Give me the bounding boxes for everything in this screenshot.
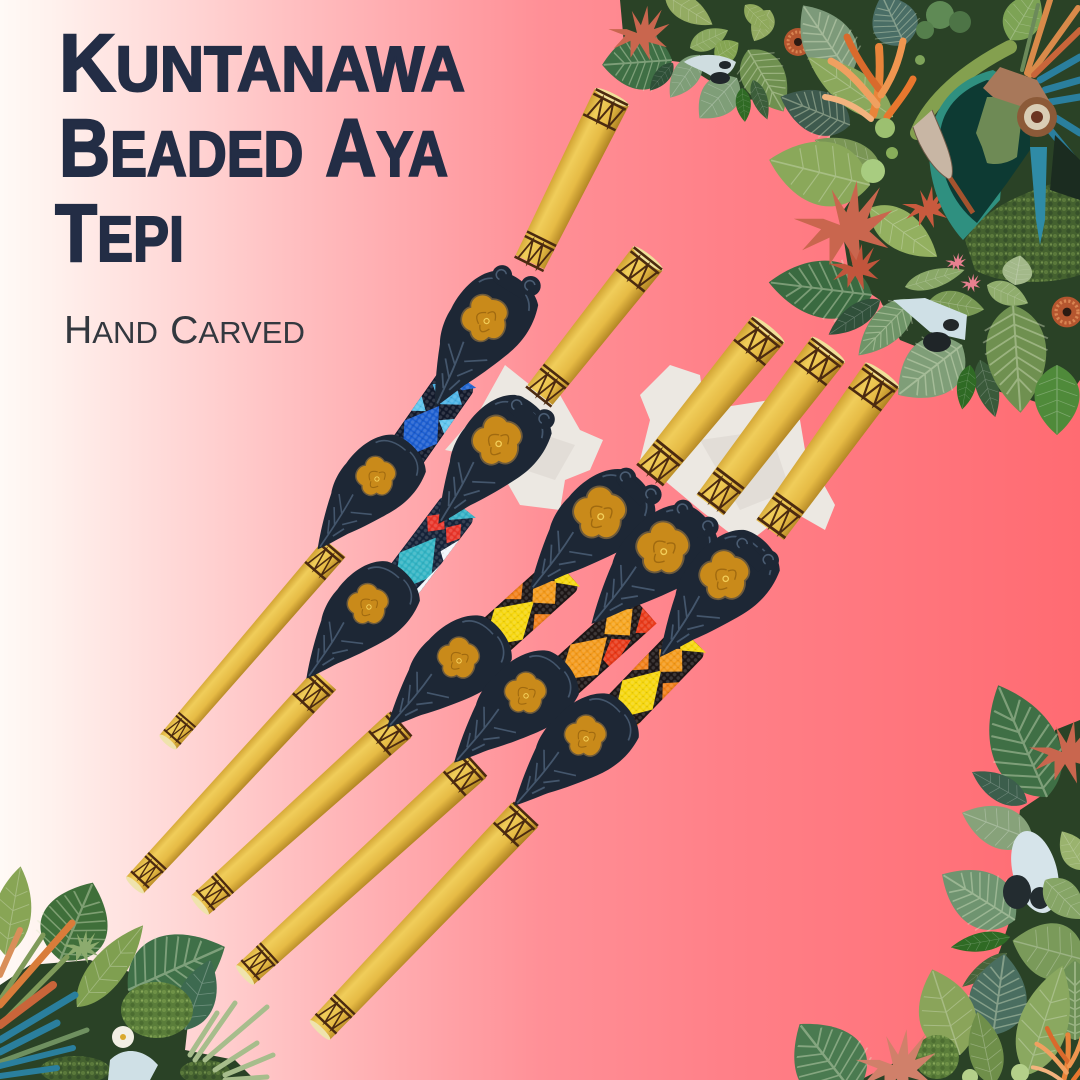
tropical flowers <box>794 37 1080 327</box>
mossy ground <box>965 175 1080 282</box>
tepi 5: yellow and orange beads <box>305 360 901 1045</box>
foliage: bottom right jungle cluster <box>769 671 1080 1080</box>
subtitle: Hand Carved <box>64 305 305 353</box>
leaves <box>600 0 1080 435</box>
quartz crystals behind tepis <box>445 365 835 545</box>
title: Beaded Aya <box>59 95 448 196</box>
leaves and feathers <box>0 863 273 1080</box>
title: Kuntanawa <box>59 10 465 111</box>
foliage: bottom left jungle cluster <box>0 863 273 1080</box>
tepi 1: blue beads <box>155 85 631 753</box>
leaves and flowers <box>769 671 1080 1080</box>
tepi 4: orange and red beads <box>231 334 847 990</box>
foliage: top right jungle cluster <box>600 0 1080 435</box>
base mass <box>0 960 255 1080</box>
title <box>55 10 465 281</box>
stream and rocks <box>893 298 967 352</box>
figure: warrior with feather headdress in arch <box>913 0 1080 245</box>
tepi 2: turquoise and red beads <box>122 244 665 897</box>
upper leaves <box>859 193 1035 322</box>
tepi 3: yellow beads <box>186 314 787 920</box>
title: Tepi <box>55 180 184 281</box>
base mass <box>860 720 1080 1080</box>
foliage base mass <box>620 0 1080 410</box>
